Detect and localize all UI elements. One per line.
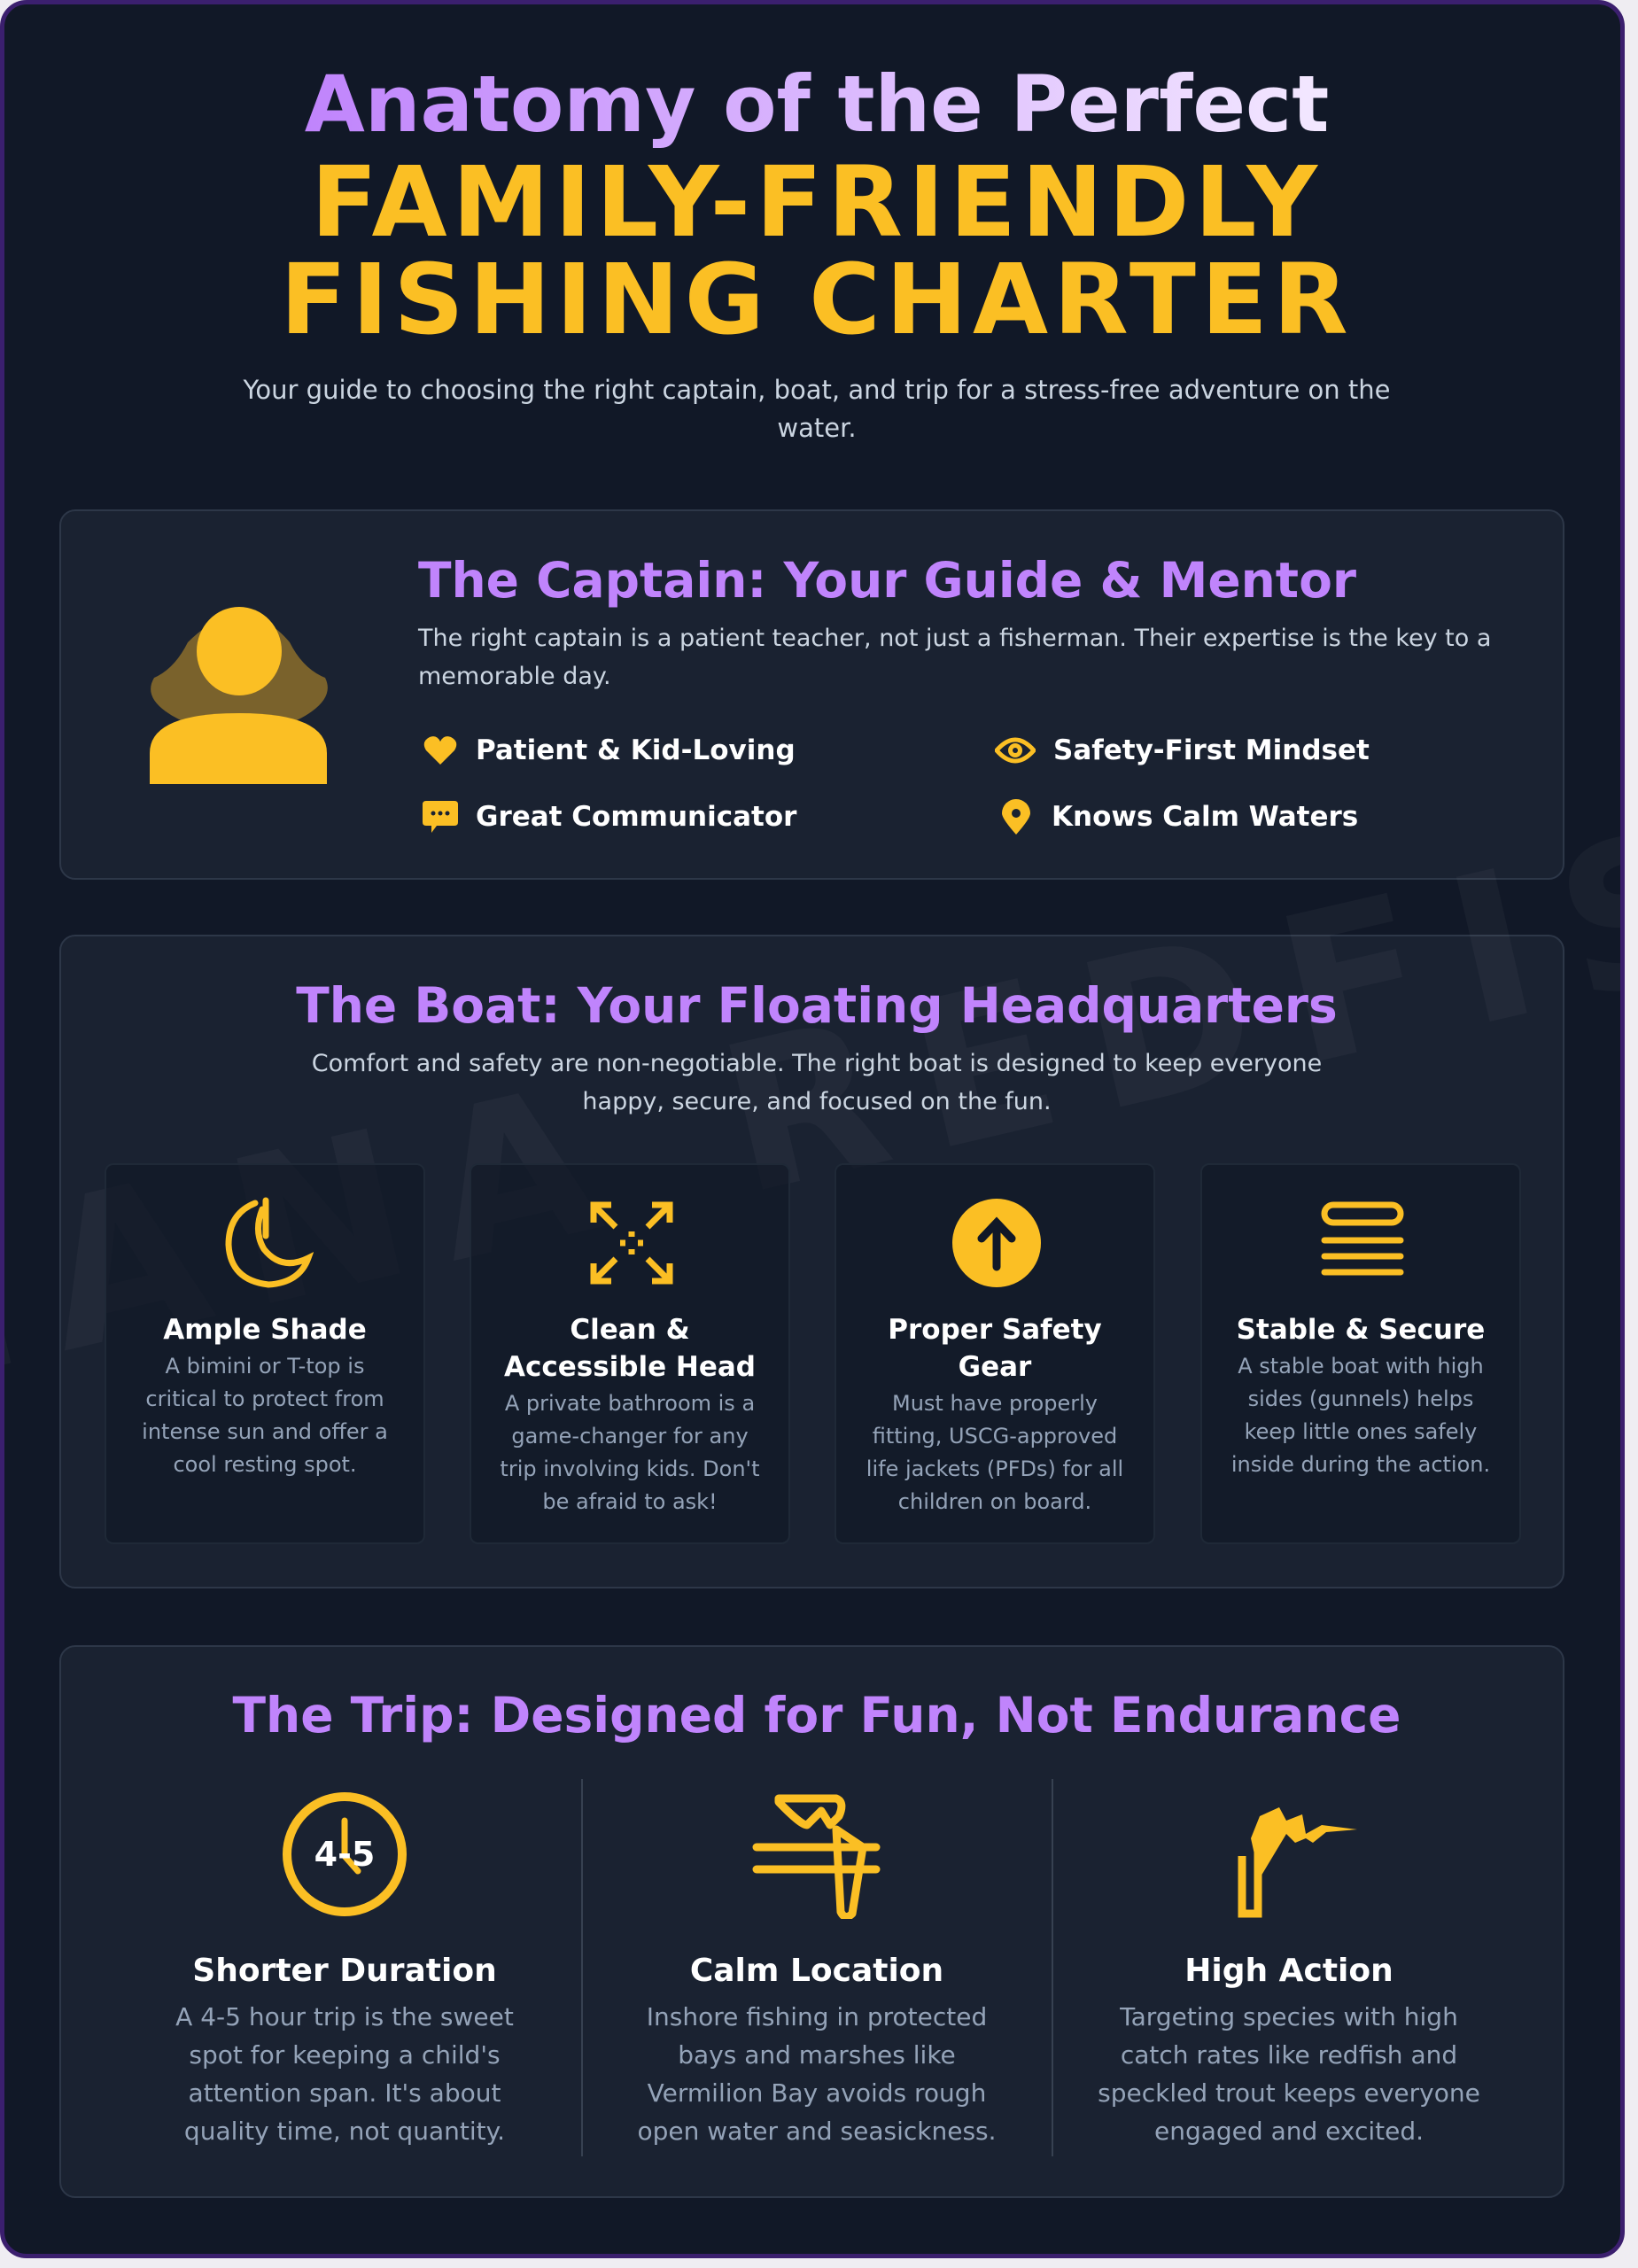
card: head: Clean & (570, 1314, 690, 1346)
card: ample shade: A bimini or T-top is critical to protect from intense sun and offer a cool resting spot. (142, 1354, 388, 1477)
icon: layers (1322, 1201, 1403, 1276)
panel: trip (59, 1645, 1564, 2198)
title (280, 58, 1354, 356)
text: boat description: Comfort and safety are non-negotiable. The right boat is designed to keep everyone happy, secure, and focused on the fun. (312, 1050, 1322, 1115)
card: safety gear (835, 1163, 1155, 1544)
column: action (1098, 1807, 1480, 2146)
icon: calm water (753, 1795, 881, 1919)
panel: captain (59, 509, 1564, 880)
item: calm waters: Knows Calm Waters (1052, 801, 1358, 833)
item: patient: Patient & Kid-Loving (476, 734, 796, 766)
icon: arrow circle (952, 1199, 1041, 1287)
subtitle: Your guide to choosing the right captain, boat, and trip for a stress-free adventure on the water. (244, 375, 1390, 443)
card: head (470, 1163, 790, 1544)
panel: boat (59, 935, 1564, 1588)
card: safety gear: Proper Safety (888, 1314, 1102, 1346)
title: FISHING CHARTER (280, 243, 1354, 356)
column: location (637, 1795, 997, 2146)
card: stable: A stable boat with high sides (gunnels) helps keep little ones safely inside during the action. (1231, 1354, 1490, 1477)
card: ample shade: Ample Shade (163, 1314, 367, 1346)
column: duration (175, 1792, 514, 2146)
card: head: A private bathroom is a game-changer for any trip involving kids. Don't be afraid to ask! (500, 1391, 760, 1514)
text: captain description: The right captain is a patient teacher, not just a fisherman. Their expertise is the key to a memorable day. (418, 625, 1491, 690)
column: action: Targeting species with high catch rates like redfish and speckled trout keeps everyone engaged and excited. (1098, 2002, 1480, 2146)
column: location: Calm Location (690, 1953, 943, 1989)
item: communicator: Great Communicator (476, 801, 796, 833)
heading: boat: The Boat: Your Floating Headquarters (296, 977, 1338, 1034)
column: duration: A 4-5 hour trip is the sweet spot for keeping a child's attention span. It's about quality time, not quantity. (175, 2002, 514, 2146)
icon: fish rod (1238, 1807, 1357, 1917)
title: Anatomy of the Perfect (305, 58, 1329, 150)
card: ample shade (105, 1163, 425, 1544)
icon: clock (283, 1792, 407, 1916)
card: stable: Stable & Secure (1237, 1314, 1485, 1346)
icon: expand arrows (590, 1201, 673, 1285)
icon: moon (225, 1198, 314, 1288)
card: head: Accessible Head (504, 1351, 756, 1383)
item: safety: Safety-First Mindset (1053, 734, 1370, 766)
title: FAMILY-FRIENDLY (311, 145, 1323, 259)
heading: captain: The Captain: Your Guide & Mentor (418, 552, 1356, 609)
heading: trip: The Trip: Designed for Fun, Not Endurance (233, 1687, 1401, 1744)
column: location: Inshore fishing in protected bays and marshes like Vermilion Bay avoids rough open water and seasickness. (637, 2002, 997, 2146)
icon: captain avatar (150, 607, 328, 784)
column: action: High Action (1184, 1953, 1393, 1989)
card: safety gear: Must have properly fitting, USCG-approved life jackets (PFDs) for all children on board. (866, 1391, 1123, 1514)
icon: clock: 4-5 (314, 1835, 375, 1874)
card: safety gear: Gear (959, 1351, 1031, 1383)
column: duration: Shorter Duration (192, 1953, 497, 1989)
card: stable (1200, 1163, 1521, 1544)
